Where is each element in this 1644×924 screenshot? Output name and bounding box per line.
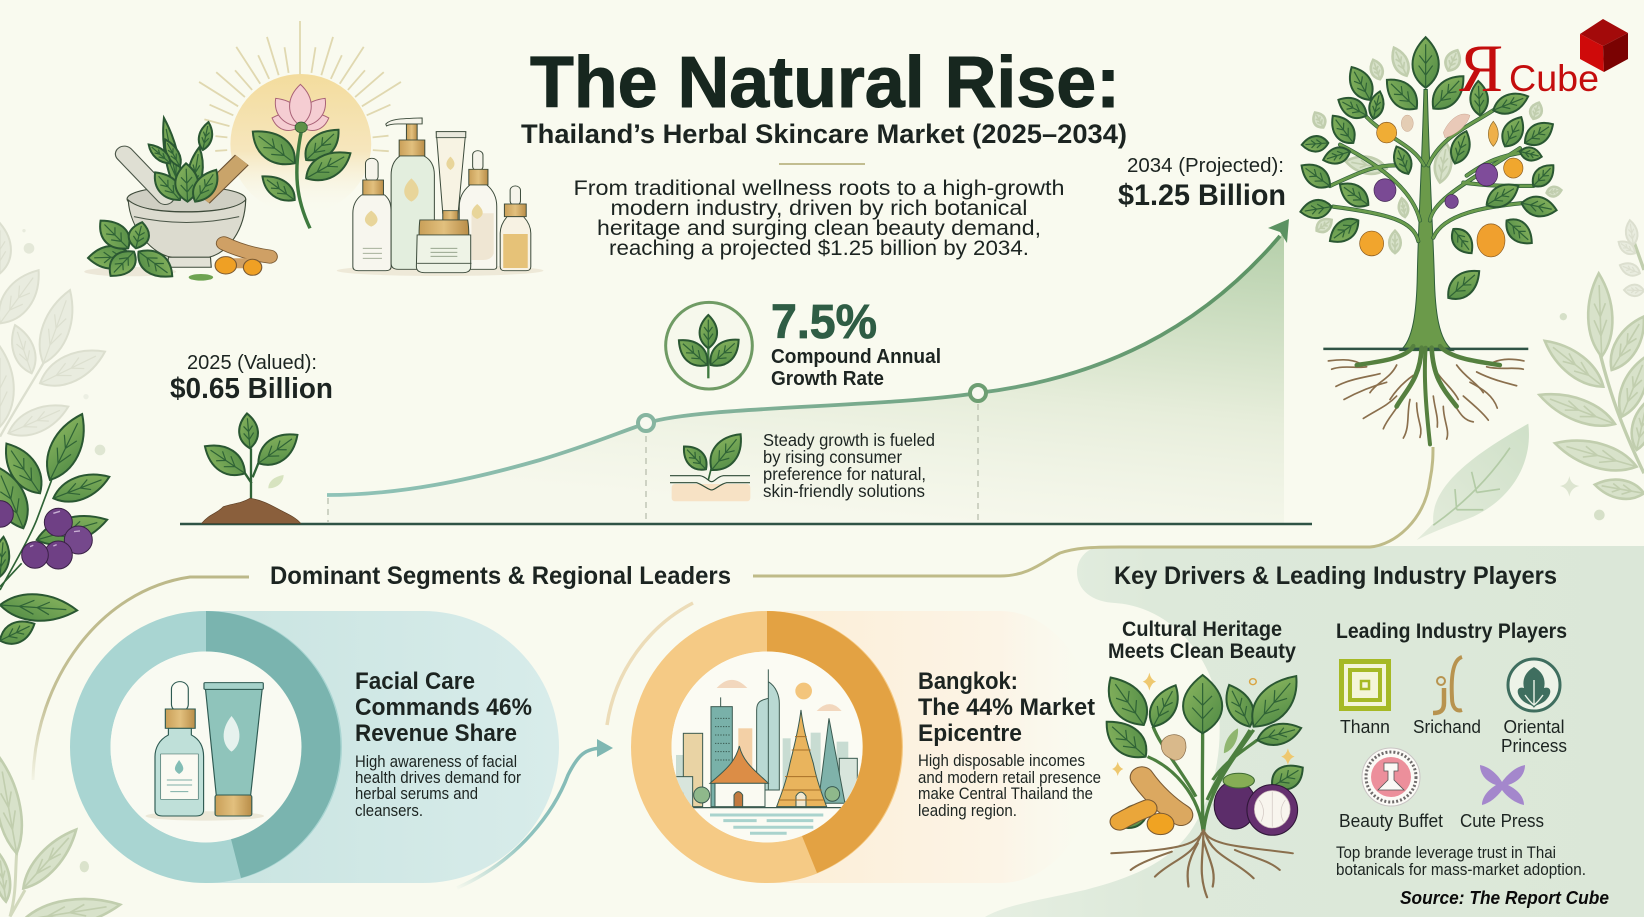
logo: RCube: Я [1459,30,1503,106]
steady growth note: by rising consumer [763,447,902,467]
green panel background: key drivers [985,546,1644,917]
logo: Srichand: Srichand [1413,717,1481,737]
CAGR callout: Growth Rate [771,368,884,390]
icon: growth tree [1296,37,1562,444]
background sprig: bottom left [0,756,122,924]
decorative arc: tan [607,603,693,725]
players note: botanicals for mass-market adoption. [1336,861,1586,879]
icon: mortar and pestle [84,117,270,284]
connector line: to tree roots and section heading [753,447,1433,576]
cultural heritage heading: Cultural Heritage [1122,618,1282,641]
intro paragraph: From traditional wellness roots to a high-growth [574,177,1064,200]
CAGR callout: 7.5% [771,296,877,349]
panel: facial care: High awareness of facial [355,753,517,771]
intro paragraph: modern industry, driven by rich botanical [610,197,1028,220]
heading: dominant segments: Dominant Segments & Regional Leaders [270,562,731,590]
players note: Top brande leverage trust in Thai [1336,844,1556,862]
panel: facial care: health drives demand for [355,769,521,787]
logo: Thann [1339,659,1391,737]
panel: bangkok: make Central Thailand the [918,785,1093,803]
2025 value label: $0.65 Billion [170,373,333,405]
2025 value label [170,352,333,405]
panel: bangkok: High disposable incomes [918,752,1085,770]
icon: seedling [198,413,304,523]
icon: lotus flower [243,84,357,228]
logo: RCube [1459,19,1628,106]
illustration: herbs, mortar, flower and skincare bottles [84,74,543,284]
panel: facial care: herbal serums and [355,785,478,803]
icon: CAGR leaf circle [666,302,752,389]
logo: Beauty Buffet [1339,748,1443,831]
2034 value label [1118,155,1286,212]
intro paragraph [574,177,1064,260]
arrow: between segment panels [457,739,613,888]
cultural heritage heading [1108,618,1296,663]
2034 value label: 2034 (Projected): [1127,155,1284,177]
panel: facial care: Commands 46% [355,694,532,721]
logo: Oriental Princess [1501,659,1567,756]
panel: bangkok: and modern retail presence [918,769,1101,787]
background sprig: left upper [0,223,111,455]
donut: 44% share [651,611,902,873]
icon: berry sprig [0,408,113,650]
subtitle: Thailand’s Herbal Skincare Market (2025–2034) [521,119,1127,149]
steady growth note: Steady growth is fueled [763,430,935,450]
logo: Beauty Buffet: Beauty Buffet [1339,811,1443,831]
players note [1336,844,1586,879]
panel: facial care: cleansers. [355,802,423,820]
panel: bangkok: leading region. [918,802,1017,820]
2025 value label: 2025 (Valued): [187,352,317,374]
intro paragraph: reaching a projected $1.25 billion by 2034. [609,237,1029,260]
icon: serum and tube [145,682,264,821]
panel: facial care: Revenue Share [355,720,517,747]
steady growth note [670,427,935,501]
logo: Oriental Princess: Princess [1501,736,1567,756]
intro paragraph: heritage and surging clean beauty demand, [597,217,1041,240]
icon: large pale leaf [1417,424,1529,540]
background sprig: right [1535,219,1644,520]
heading: dominant segments [33,562,731,780]
panel: facial care [90,611,559,883]
logo: Cute Press [1460,765,1544,831]
leading industry players: Leading Industry Players [1336,620,1567,643]
title: The Natural Rise: [530,43,1120,123]
icon: sprout in soil [670,427,750,501]
logo: Cute Press: Cute Press [1460,811,1544,831]
heading: key drivers: Key Drivers & Leading Industry Players [1114,562,1557,590]
leading industry players [1336,620,1586,879]
cultural heritage heading: Meets Clean Beauty [1108,640,1296,663]
CAGR callout [666,296,941,390]
panel: bangkok: Epicentre [918,720,1022,747]
CAGR callout: Compound Annual [771,346,941,368]
tree roots [1328,359,1524,439]
panel: facial care: Facial Care [355,668,475,695]
logo: Thann: Thann [1340,717,1390,737]
panel: bangkok: Bangkok: [918,668,1018,695]
logo: Srichand [1413,657,1481,737]
icon: sun rays behind flower [199,21,401,151]
steady growth note: preference for natural, [763,464,926,484]
panel: bangkok [651,611,1101,883]
logo: Oriental Princess: Oriental [1504,717,1564,737]
donut: 46% share [90,611,340,878]
icon: skincare bottles [337,118,543,276]
panel: bangkok: The 44% Market [918,694,1095,721]
arrow head [1268,219,1289,243]
2034 value label: $1.25 Billion [1118,179,1286,212]
source credit: Source: The Report Cube [1400,888,1609,908]
logo: RCube: Cube [1509,58,1599,99]
icon: Bangkok skyline [672,669,862,833]
growth chart [180,219,1312,524]
steady growth note: skin-friendly solutions [763,481,925,501]
icon: botanical heritage plant [1096,667,1310,897]
